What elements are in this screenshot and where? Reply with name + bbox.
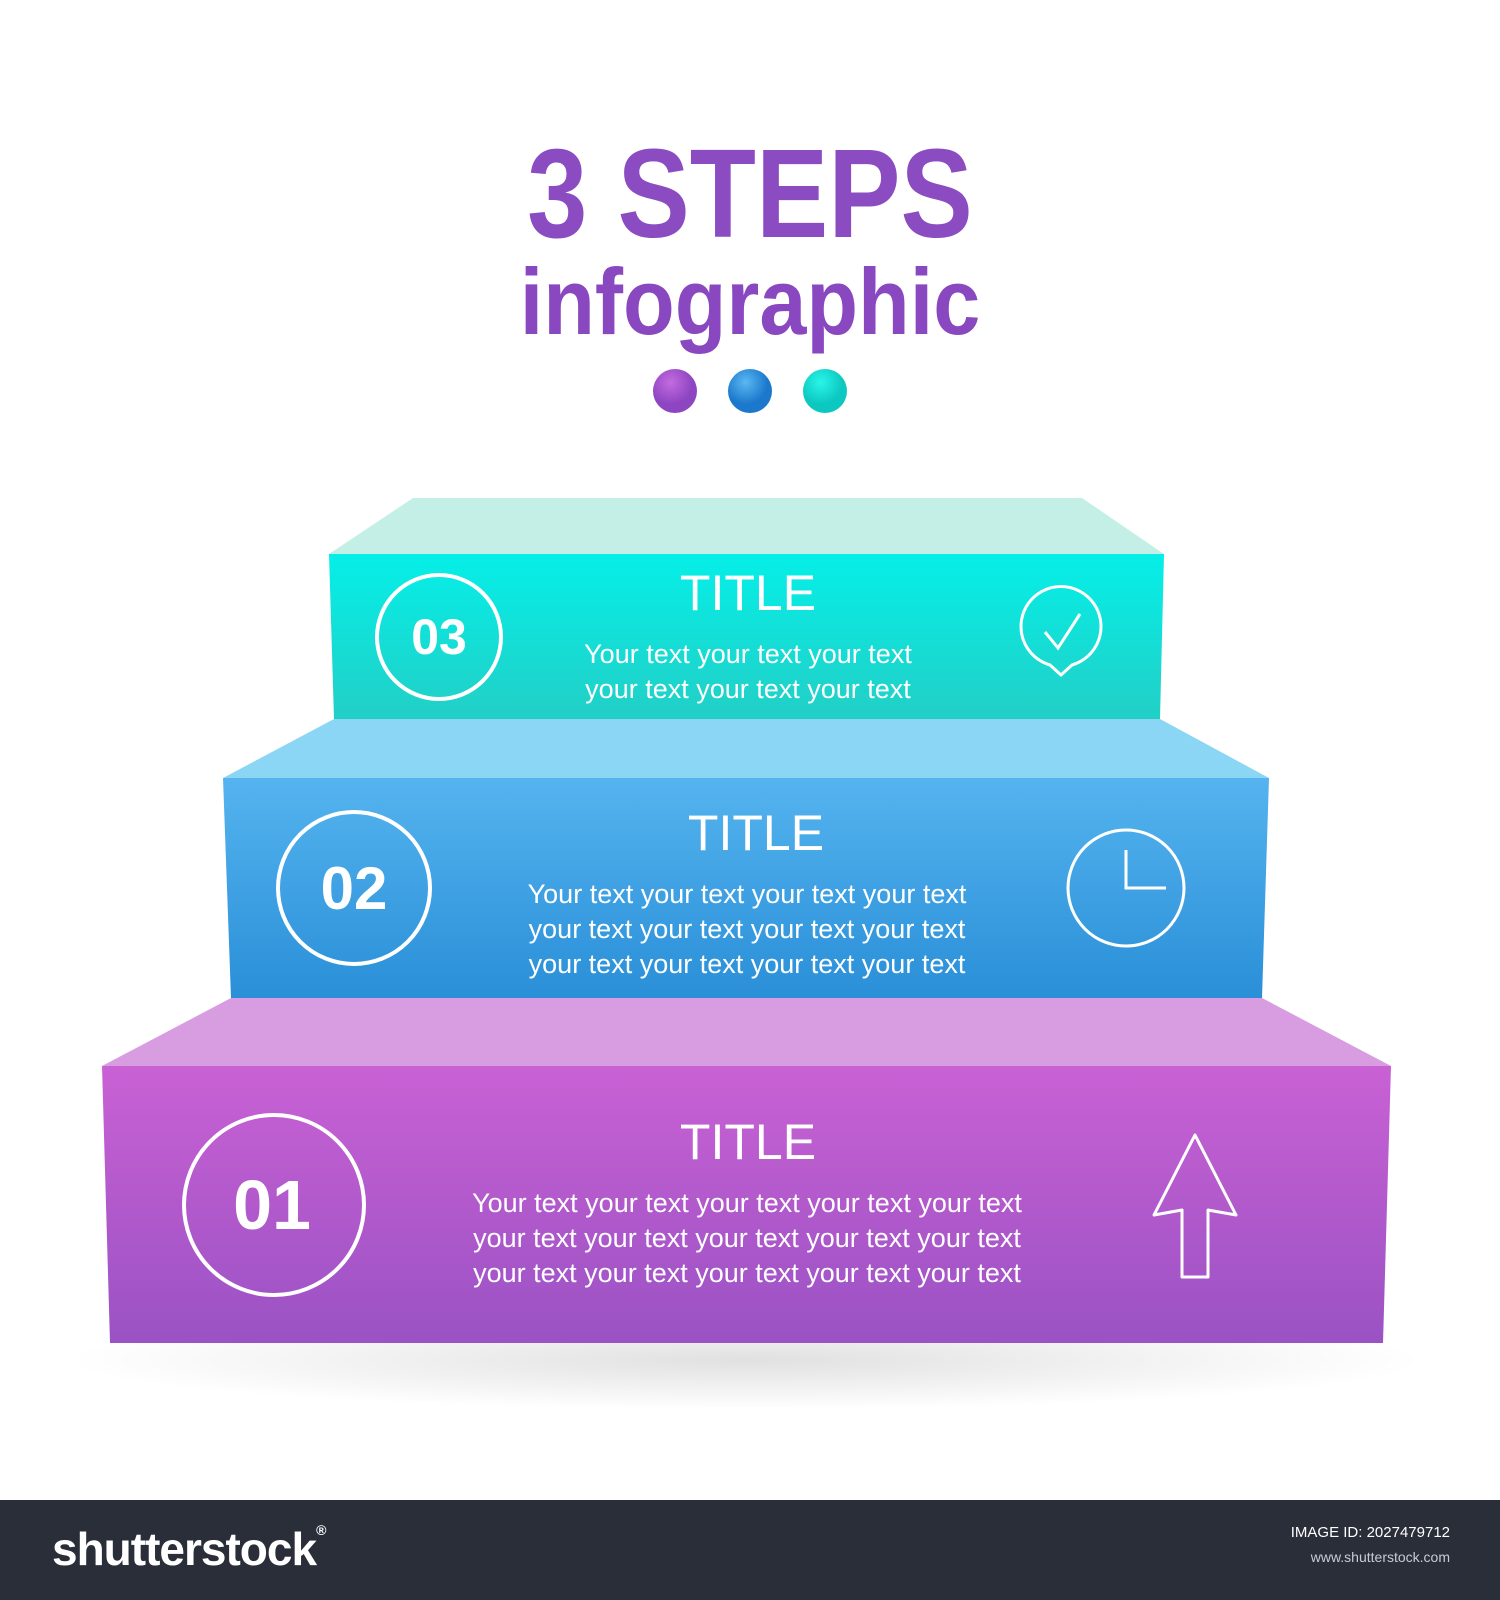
step 1: 01: [233, 1166, 311, 1244]
step 2: Your text your text your text your text: [528, 879, 967, 909]
step 2: [223, 719, 1269, 998]
step 2: your text your text your text your text: [529, 914, 966, 944]
title: [520, 123, 980, 354]
step 1: TITLE: [680, 1114, 816, 1170]
step 1: Your text your text your text your text your text: [472, 1188, 1022, 1218]
step 3: 03: [411, 609, 467, 665]
step 1: [102, 998, 1391, 1343]
step 3: [329, 498, 1164, 719]
title: 3 STEPS: [527, 123, 973, 264]
footer bar: [0, 1500, 1500, 1600]
step 2: 02: [321, 855, 387, 922]
step 1: your text your text your text your text your text: [473, 1223, 1021, 1253]
step 2: your text your text your text your text: [529, 949, 966, 979]
image id: IMAGE ID: 2027479712: [1291, 1524, 1450, 1541]
title: infographic: [520, 249, 980, 354]
step 3: your text your text your text: [585, 674, 911, 704]
step 1: your text your text your text your text your text: [473, 1258, 1021, 1288]
image id: [1291, 1524, 1450, 1565]
step 3: Your text your text your text: [584, 639, 912, 669]
step 3: TITLE: [680, 565, 816, 621]
logo: shutterstock®: [52, 1522, 325, 1575]
step 2: TITLE: [688, 805, 824, 861]
image id: www.shutterstock.com: [1311, 1549, 1450, 1565]
